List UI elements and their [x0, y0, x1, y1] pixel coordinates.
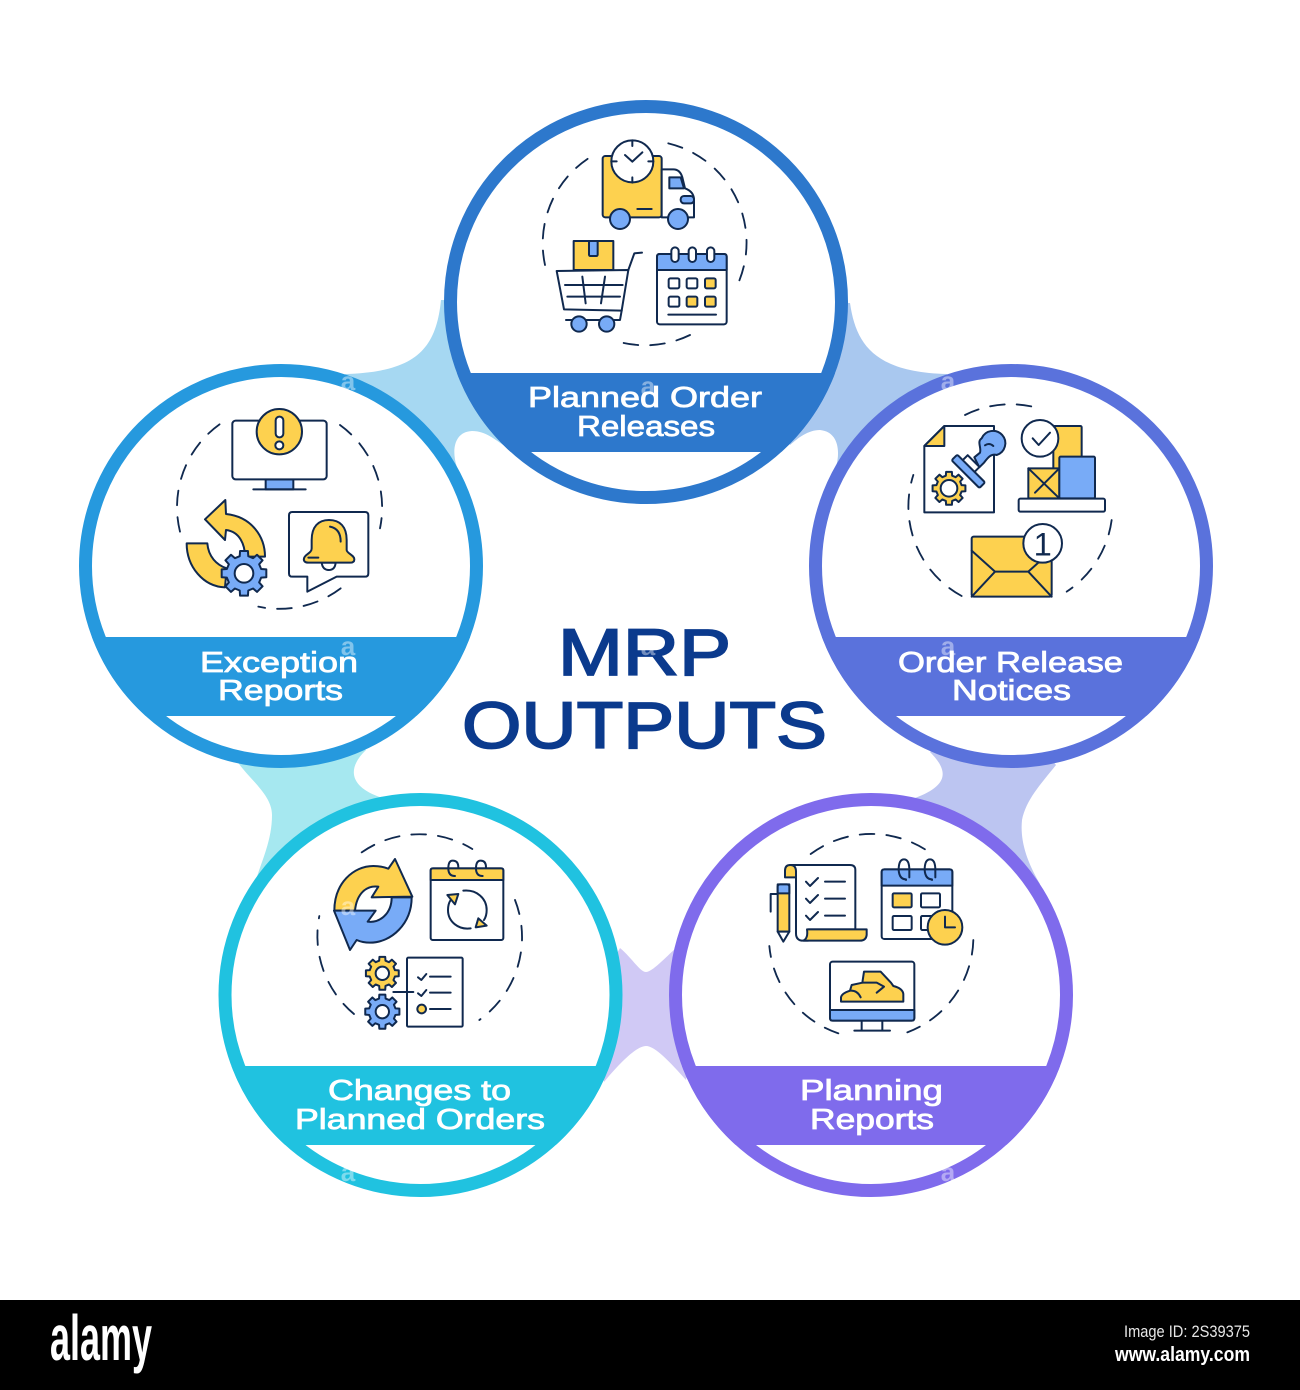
connector: order release notices to planning reports [915, 700, 1056, 884]
icon: truck, cart and calendar [543, 140, 747, 345]
watermark glyphs: a [341, 891, 356, 921]
icon: refresh arrows, calendar and checklist [317, 834, 522, 1029]
label: planned order releases: Planned Order [528, 382, 762, 414]
watermark glyphs: a [341, 631, 356, 661]
panel: planned order releases [450, 106, 842, 498]
label: changes to planned orders [295, 1075, 545, 1136]
watermark glyphs: a [941, 366, 956, 396]
label: exception reports: Exception [200, 647, 358, 679]
panel: planning reports [676, 800, 1066, 1190]
circle and band: planning reports [676, 800, 1066, 1190]
label: planned order releases: Releases [577, 411, 715, 443]
label: planning reports: Reports [810, 1104, 934, 1136]
icon: checklist, calendar and monitor [769, 834, 973, 1033]
watermark glyphs: a [941, 631, 956, 661]
panel: order release notices [816, 370, 1206, 762]
watermark glyphs: a [341, 1157, 356, 1187]
footer image id: Image ID: 2S39375 [1124, 1322, 1250, 1341]
circle and band: planned order releases [450, 106, 842, 498]
footer logo: alamy [50, 1302, 152, 1374]
label: exception reports: Reports [218, 675, 343, 707]
icon: alert monitor, cycle and bell [177, 409, 382, 609]
watermark glyphs: a [341, 366, 356, 396]
watermark glyphs: a [641, 631, 656, 661]
watermark glyphs [341, 366, 956, 1187]
watermark glyphs: a [641, 371, 656, 401]
label: planned order releases [528, 382, 762, 443]
label: planning reports [800, 1075, 943, 1136]
panel: changes to planned orders [225, 800, 616, 1190]
connector: planned order releases to order release notices [730, 300, 947, 482]
title: OUTPUTS [462, 688, 827, 762]
watermark glyphs: a [941, 1157, 956, 1187]
label: planning reports: Planning [800, 1075, 943, 1107]
circle and band: changes to planned orders [225, 800, 616, 1190]
label: order release notices: Notices [952, 675, 1071, 707]
badge number: 1 [1034, 525, 1052, 562]
panel: exception reports [86, 370, 476, 762]
icon: stamped document, boxes and envelope [908, 404, 1112, 597]
connector: changes to planned orders to planning reports [590, 948, 700, 1082]
footer url: www.alamy.com [1114, 1344, 1250, 1366]
circle and band: exception reports [86, 370, 476, 762]
connector: exception reports to changes to planned orders [236, 700, 390, 880]
footer bar [0, 1300, 1300, 1390]
label: order release notices [898, 647, 1123, 707]
label: changes to planned orders: Planned Orders [295, 1104, 545, 1136]
title: MRP [558, 615, 731, 689]
label: changes to planned orders: Changes to [328, 1075, 511, 1107]
connector: planned order releases to exception reports [345, 300, 560, 482]
label: exception reports [200, 647, 358, 707]
label: order release notices: Order Release [898, 647, 1123, 679]
circle and band: order release notices [816, 370, 1206, 762]
title [462, 615, 827, 762]
